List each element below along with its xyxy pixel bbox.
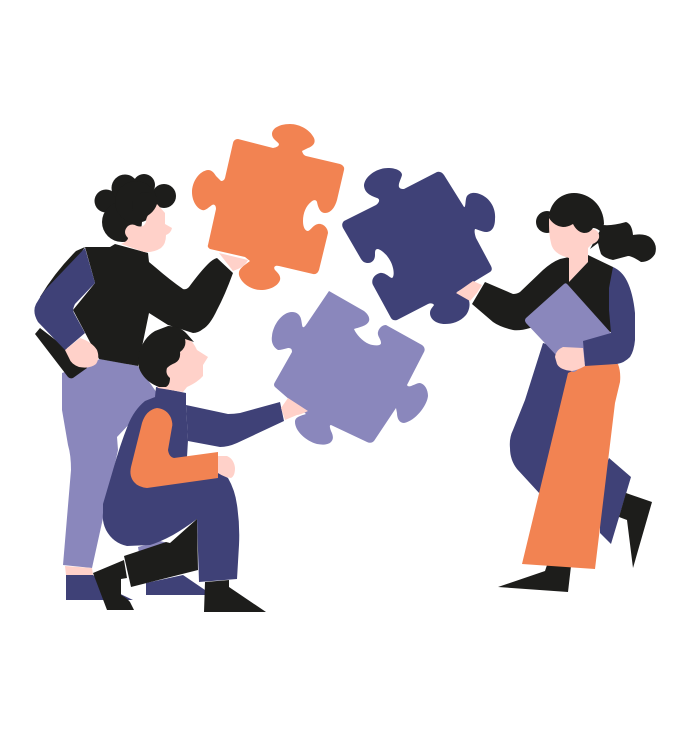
navy sleeve: [583, 267, 635, 366]
black folder: [35, 328, 87, 378]
black sweater and arm: [73, 244, 233, 366]
hand holding tablet: [555, 347, 585, 371]
sweater outer strip: [40, 247, 85, 300]
left boot: [93, 560, 134, 610]
black top and arm: [472, 255, 613, 332]
puzzle piece: lavender: [272, 291, 428, 445]
orange overskirt: [522, 364, 620, 569]
puzzle piece: orange: [192, 124, 344, 290]
body and legs: [103, 387, 239, 582]
left shoe: [498, 565, 571, 592]
hair: [138, 326, 194, 387]
figure: woman with tablet: [456, 193, 656, 592]
neck: [569, 250, 588, 282]
right shoe: [146, 575, 205, 595]
navy skirt: [510, 343, 631, 544]
hand on knee: [218, 456, 235, 478]
orange sleeve: [130, 408, 218, 488]
hair top: [549, 193, 604, 233]
raised hand: [219, 253, 248, 271]
reaching hand: [281, 398, 308, 420]
shin: [124, 519, 198, 587]
hair bun: [536, 211, 558, 233]
rear leg: [138, 541, 172, 553]
extended hand: [456, 281, 482, 301]
ponytail: [590, 222, 656, 262]
tablet: [525, 283, 611, 372]
puzzle piece: navy: [342, 168, 495, 324]
figure: kneeling man: [93, 326, 308, 612]
face: [549, 215, 599, 258]
hand on hip: [65, 338, 98, 368]
left shoe: [66, 575, 133, 600]
right boot: [204, 580, 266, 612]
face: [121, 204, 172, 252]
face: [150, 333, 208, 392]
ankle: [65, 566, 93, 575]
right shoe: [619, 493, 652, 568]
front leg: [62, 359, 157, 568]
reaching arm: [186, 402, 284, 447]
hair: [94, 174, 176, 242]
navy sleeve: [34, 248, 95, 350]
figure: standing man: [34, 174, 248, 600]
